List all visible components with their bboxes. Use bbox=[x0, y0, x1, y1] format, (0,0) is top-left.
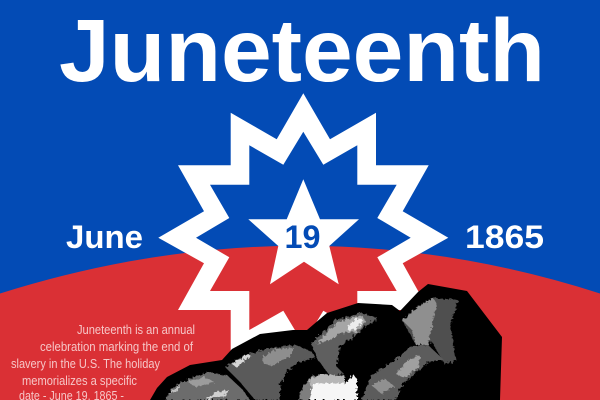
text block: description: Juneteenth is an annual bbox=[77, 323, 195, 337]
fist shading bbox=[165, 298, 458, 400]
text block: description: celebration marking the end of bbox=[40, 340, 193, 354]
fist black silhouette bbox=[150, 284, 502, 400]
panel: red arc ground bbox=[0, 246, 600, 400]
illustration: raised fist bbox=[150, 284, 502, 400]
star number 19: 19 bbox=[284, 219, 320, 255]
text block: description: slavery in the U.S. The holiday bbox=[11, 357, 161, 371]
icon: Juneteenth flag star burst bbox=[158, 93, 448, 382]
date label: June: June bbox=[66, 219, 143, 255]
text block: description bbox=[11, 323, 195, 400]
title: Juneteenth bbox=[59, 0, 545, 100]
text block: description: memorializes a specific bbox=[22, 374, 137, 388]
date label: 1865: 1865 bbox=[465, 219, 544, 255]
icon: centre star bbox=[248, 179, 359, 284]
